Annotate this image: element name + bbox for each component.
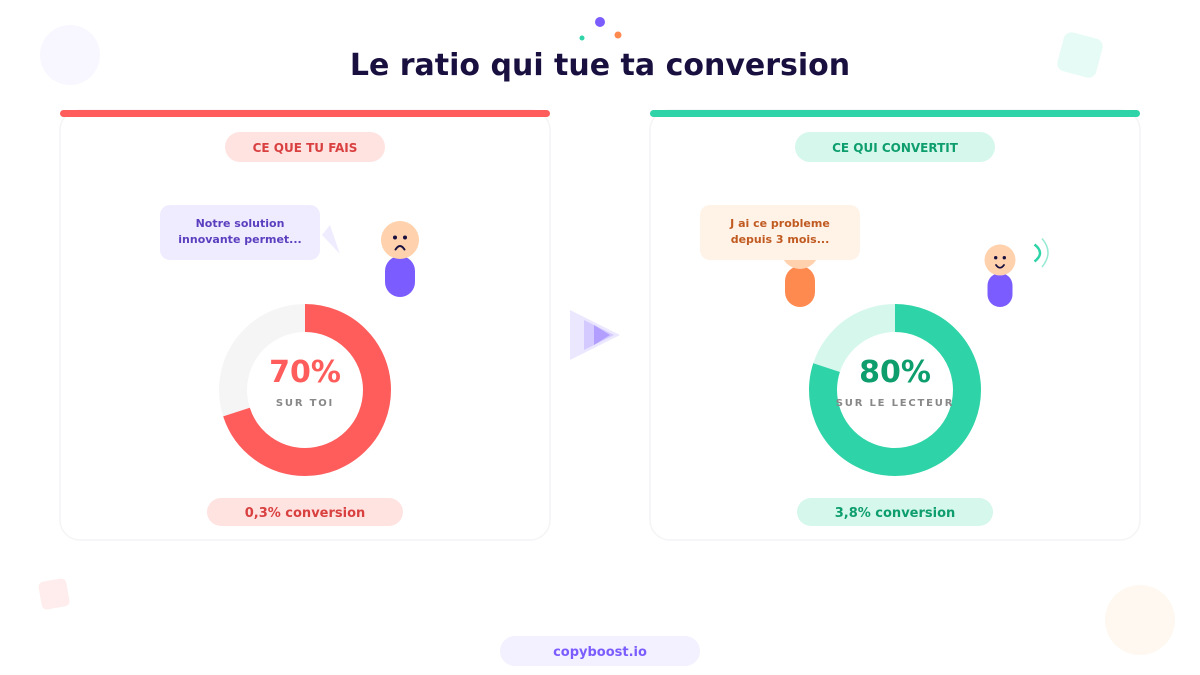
donut chart 70% bbox=[233, 318, 377, 462]
right speech bubble bbox=[700, 205, 860, 260]
right speech bubble: depuis 3 mois... bbox=[731, 233, 829, 246]
left badge bbox=[225, 132, 385, 162]
right speech bubble: J ai ce probleme bbox=[729, 217, 830, 230]
panel: ce que tu fais bbox=[60, 110, 550, 540]
donut chart 80% bbox=[823, 318, 967, 462]
donut chart 70%: SUR TOI bbox=[276, 398, 334, 409]
right conversion pill bbox=[797, 498, 993, 526]
title dots bbox=[580, 17, 622, 40]
left conversion pill bbox=[207, 498, 403, 526]
panel: ce qui convertit bbox=[650, 110, 1140, 540]
decor: peach circle bbox=[1105, 585, 1175, 655]
decor: lavender circle bbox=[40, 25, 100, 85]
left badge: CE QUE TU FAIS bbox=[253, 141, 357, 155]
right conversion pill: 3,8% conversion bbox=[835, 506, 955, 521]
arrow bbox=[570, 310, 620, 360]
left conversion pill: 0,3% conversion bbox=[245, 506, 365, 521]
icon: happy person bbox=[984, 244, 1016, 307]
left speech bubble bbox=[160, 205, 340, 260]
decor: pink square bbox=[38, 578, 70, 610]
icon: sad person bbox=[381, 221, 419, 297]
right badge bbox=[795, 132, 995, 162]
footer pill: copyboost.io bbox=[553, 645, 647, 660]
right top bar bbox=[650, 110, 1140, 117]
footer pill bbox=[500, 636, 700, 666]
left top bar bbox=[60, 110, 550, 117]
right badge: CE QUI CONVERTIT bbox=[832, 141, 959, 155]
donut chart 80%: SUR LE LECTEUR bbox=[836, 398, 954, 409]
left card background bbox=[60, 110, 550, 540]
donut chart 70%: 70% bbox=[269, 355, 341, 390]
icon: sound waves bbox=[1034, 238, 1048, 267]
title: Le ratio qui tue ta conversion bbox=[350, 48, 850, 83]
icon: orange person bbox=[781, 231, 819, 307]
donut chart 80%: 80% bbox=[859, 355, 931, 390]
left speech bubble: innovante permet... bbox=[178, 233, 302, 246]
left speech bubble: Notre solution bbox=[196, 217, 284, 230]
decor: mint square bbox=[1056, 31, 1104, 79]
right card background bbox=[650, 110, 1140, 540]
